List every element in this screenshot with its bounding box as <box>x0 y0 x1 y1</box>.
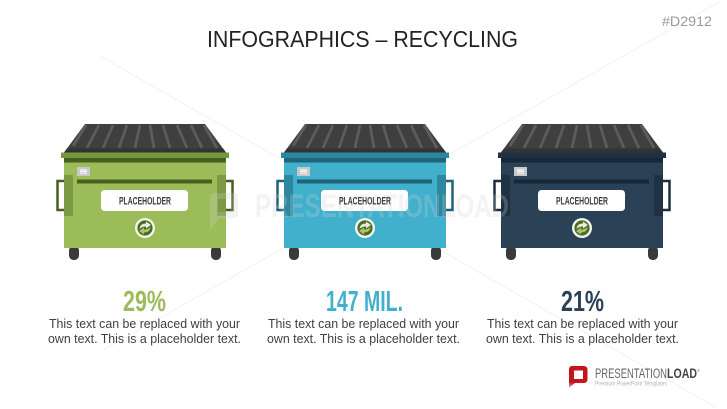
lid <box>284 124 446 152</box>
logo tagline: Premium PowerPoint Templates <box>595 382 667 388</box>
slot <box>514 180 649 184</box>
lid <box>501 124 663 152</box>
recycling icon <box>572 218 592 238</box>
side flaps <box>284 175 446 216</box>
tag <box>77 167 90 176</box>
stat: 21%: 21% <box>561 286 604 318</box>
text block: blue: own text. This is a placeholder text. <box>267 332 460 346</box>
slot <box>77 180 212 184</box>
tag <box>514 167 527 176</box>
text block: navy: This text can be replaced with your <box>487 317 678 331</box>
watermark: PRESENTATIONLOAD <box>255 188 509 224</box>
blue dumpster label text: PLACEHOLDER <box>339 196 391 208</box>
body <box>284 158 446 248</box>
side flaps <box>64 175 226 216</box>
label <box>538 190 625 211</box>
handles <box>58 181 232 210</box>
text block: green <box>48 317 241 346</box>
logo icon <box>569 366 588 388</box>
dumpster: navy <box>494 124 670 260</box>
dumpster: green <box>58 124 232 260</box>
body <box>501 158 663 248</box>
recycling icon <box>135 218 155 238</box>
title: INFOGRAPHICS – RECYCLING <box>207 26 518 52</box>
text block: blue <box>267 317 460 346</box>
rim <box>281 152 449 162</box>
recycling icon <box>355 218 375 238</box>
tag <box>297 167 310 176</box>
stat: 147 MIL.: 147 MIL. <box>326 286 403 318</box>
wheels <box>69 246 221 260</box>
label: PLACEHOLDER <box>119 196 171 208</box>
logo wordmark: PRESENTATION <box>595 366 667 381</box>
handles <box>278 181 452 210</box>
side flaps <box>501 175 663 216</box>
wheels <box>506 246 658 260</box>
label: PLACEHOLDER <box>556 196 608 208</box>
dumpster: blue <box>278 124 452 260</box>
text block: green: own text. This is a placeholder text. <box>48 332 241 346</box>
rim <box>498 152 666 162</box>
body <box>64 158 226 248</box>
handles <box>494 181 670 210</box>
text block: blue: This text can be replaced with your <box>268 317 459 331</box>
stat: 29%: 29% <box>123 286 166 318</box>
text block: navy <box>486 317 679 346</box>
text block: green: This text can be replaced with your <box>49 317 240 331</box>
product code: #D2912 <box>662 13 712 29</box>
label <box>321 190 408 211</box>
lid <box>64 124 226 152</box>
logo: PresentationLoad <box>569 366 700 388</box>
slot <box>297 180 432 184</box>
wheels <box>289 246 441 260</box>
text block: navy: own text. This is a placeholder text. <box>486 332 679 346</box>
logo: PresentationLoad: LOAD <box>667 366 697 381</box>
watermark <box>210 188 509 230</box>
label <box>101 190 188 211</box>
logo: PresentationLoad: ® <box>697 368 700 373</box>
rim <box>61 152 229 162</box>
